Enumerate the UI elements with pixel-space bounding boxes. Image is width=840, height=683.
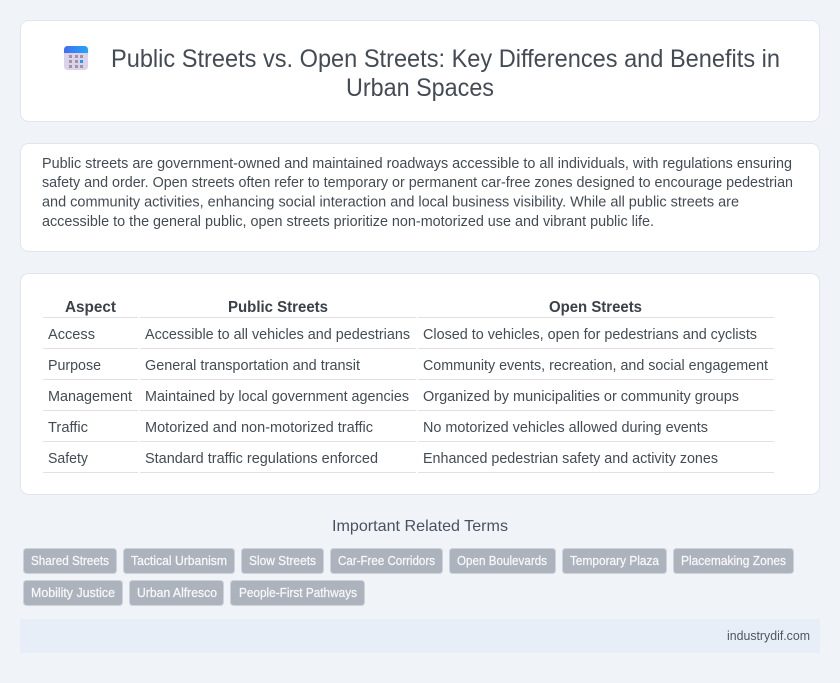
tag: temporary plaza: Temporary Plaza — [570, 554, 659, 568]
text block: introduction: Public streets are government-owned and maintained roadways accessible to all individuals, with regulations ensuring — [42, 156, 792, 172]
tag: urban alfresco — [130, 580, 224, 606]
tag: car-free corridors: Car-Free Corridors — [338, 554, 435, 568]
table row: access — [48, 327, 757, 343]
footer — [20, 619, 820, 653]
table row: access: Accessible to all vehicles and pedestrians — [145, 327, 410, 343]
table header row: Aspect — [65, 299, 117, 316]
tag: slow streets — [242, 548, 324, 574]
text block: introduction: and community activities, enhancing social interaction and local business visibility. While all public streets are — [42, 194, 739, 210]
tag: slow streets: Slow Streets — [249, 554, 316, 568]
table row: safety: Safety — [48, 451, 89, 467]
tag: people-first pathways — [230, 580, 364, 606]
panel: introduction — [20, 144, 820, 252]
table row: management — [48, 389, 739, 405]
footer source text: industrydif.com — [727, 629, 810, 643]
tag: people-first pathways: People-First Pathways — [239, 586, 357, 600]
table row: management: Maintained by local government agencies — [145, 389, 409, 405]
tag: mobility justice: Mobility Justice — [31, 586, 115, 600]
related term tags — [24, 548, 794, 606]
table row: traffic: Motorized and non-motorized traffic — [145, 420, 373, 436]
tag: open boulevards: Open Boulevards — [457, 554, 547, 568]
tag: urban alfresco: Urban Alfresco — [137, 586, 217, 600]
tag: placemaking zones — [674, 548, 794, 574]
table row: safety: Standard traffic regulations enforced — [145, 451, 378, 467]
table row: access: Access — [48, 327, 95, 343]
table row: access: Closed to vehicles, open for pedestrians and cyclists — [423, 327, 757, 343]
table row: safety: Enhanced pedestrian safety and activity zones — [423, 451, 718, 467]
title: Urban Spaces — [346, 74, 494, 102]
tag: tactical urbanism: Tactical Urbanism — [131, 554, 227, 568]
title: Public Streets vs. Open Streets: Key Differences and Benefits in — [111, 45, 780, 73]
table header row: Public Streets — [228, 299, 328, 316]
tag: shared streets: Shared Streets — [31, 554, 109, 568]
table row: safety — [48, 451, 718, 467]
table row: management: Organized by municipalities or community groups — [423, 389, 739, 405]
tag: tactical urbanism — [124, 548, 234, 574]
panel: comparison table — [20, 274, 820, 494]
text block: introduction: safety and order. Open streets often refer to temporary or permanent car-free zones designed to encourage pedestrian — [42, 175, 793, 191]
tag: shared streets — [24, 548, 116, 574]
table row: purpose: General transportation and transit — [145, 358, 360, 374]
table header row: Open Streets — [549, 299, 642, 316]
table row: traffic: Traffic — [48, 420, 88, 436]
table header row — [65, 299, 642, 316]
table row: purpose: Purpose — [48, 358, 101, 374]
table row: management: Management — [48, 389, 132, 405]
tag: placemaking zones: Placemaking Zones — [681, 554, 786, 568]
heading: important related terms: Important Related Terms — [332, 518, 508, 535]
tag: car-free corridors — [330, 548, 442, 574]
table row: purpose — [48, 358, 768, 374]
panel: header — [20, 20, 820, 122]
icon: calendar — [64, 46, 88, 70]
tag: open boulevards — [450, 548, 556, 574]
tag: mobility justice — [24, 580, 122, 606]
table row: purpose: Community events, recreation, and social engagement — [423, 358, 768, 374]
tag: temporary plaza — [562, 548, 666, 574]
table row: traffic — [48, 420, 708, 436]
text block: introduction: accessible to the general public, open streets prioritize non-motorized use and vibrant public life. — [42, 214, 654, 230]
table row: traffic: No motorized vehicles allowed during events — [423, 420, 708, 436]
